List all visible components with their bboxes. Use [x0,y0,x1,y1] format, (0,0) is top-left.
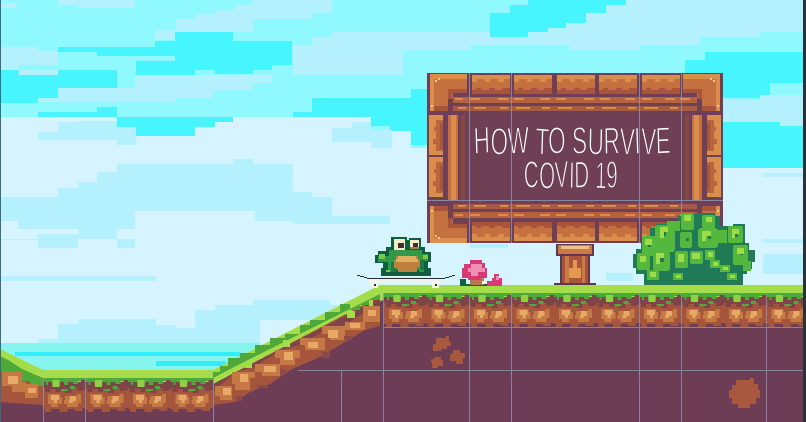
bush [633,213,755,285]
stump post [554,244,596,285]
pink mushrooms [460,260,502,286]
sign title: HOW TO SURVIVE [472,120,671,164]
top frame bricks [430,74,720,111]
sea [0,343,260,383]
bottom frame bricks [430,204,720,243]
buried rocks [431,336,760,408]
skateboard [357,275,455,288]
ground [0,285,806,422]
side frame columns [429,115,721,200]
signboard [427,73,723,243]
plateau grass tiles [384,293,806,327]
sign title: COVID 19 [523,154,618,198]
frog on skateboard [357,237,455,288]
sign title [472,120,671,198]
frog [375,237,431,276]
tile grid lines [44,73,803,422]
valley grass tiles [43,378,213,412]
